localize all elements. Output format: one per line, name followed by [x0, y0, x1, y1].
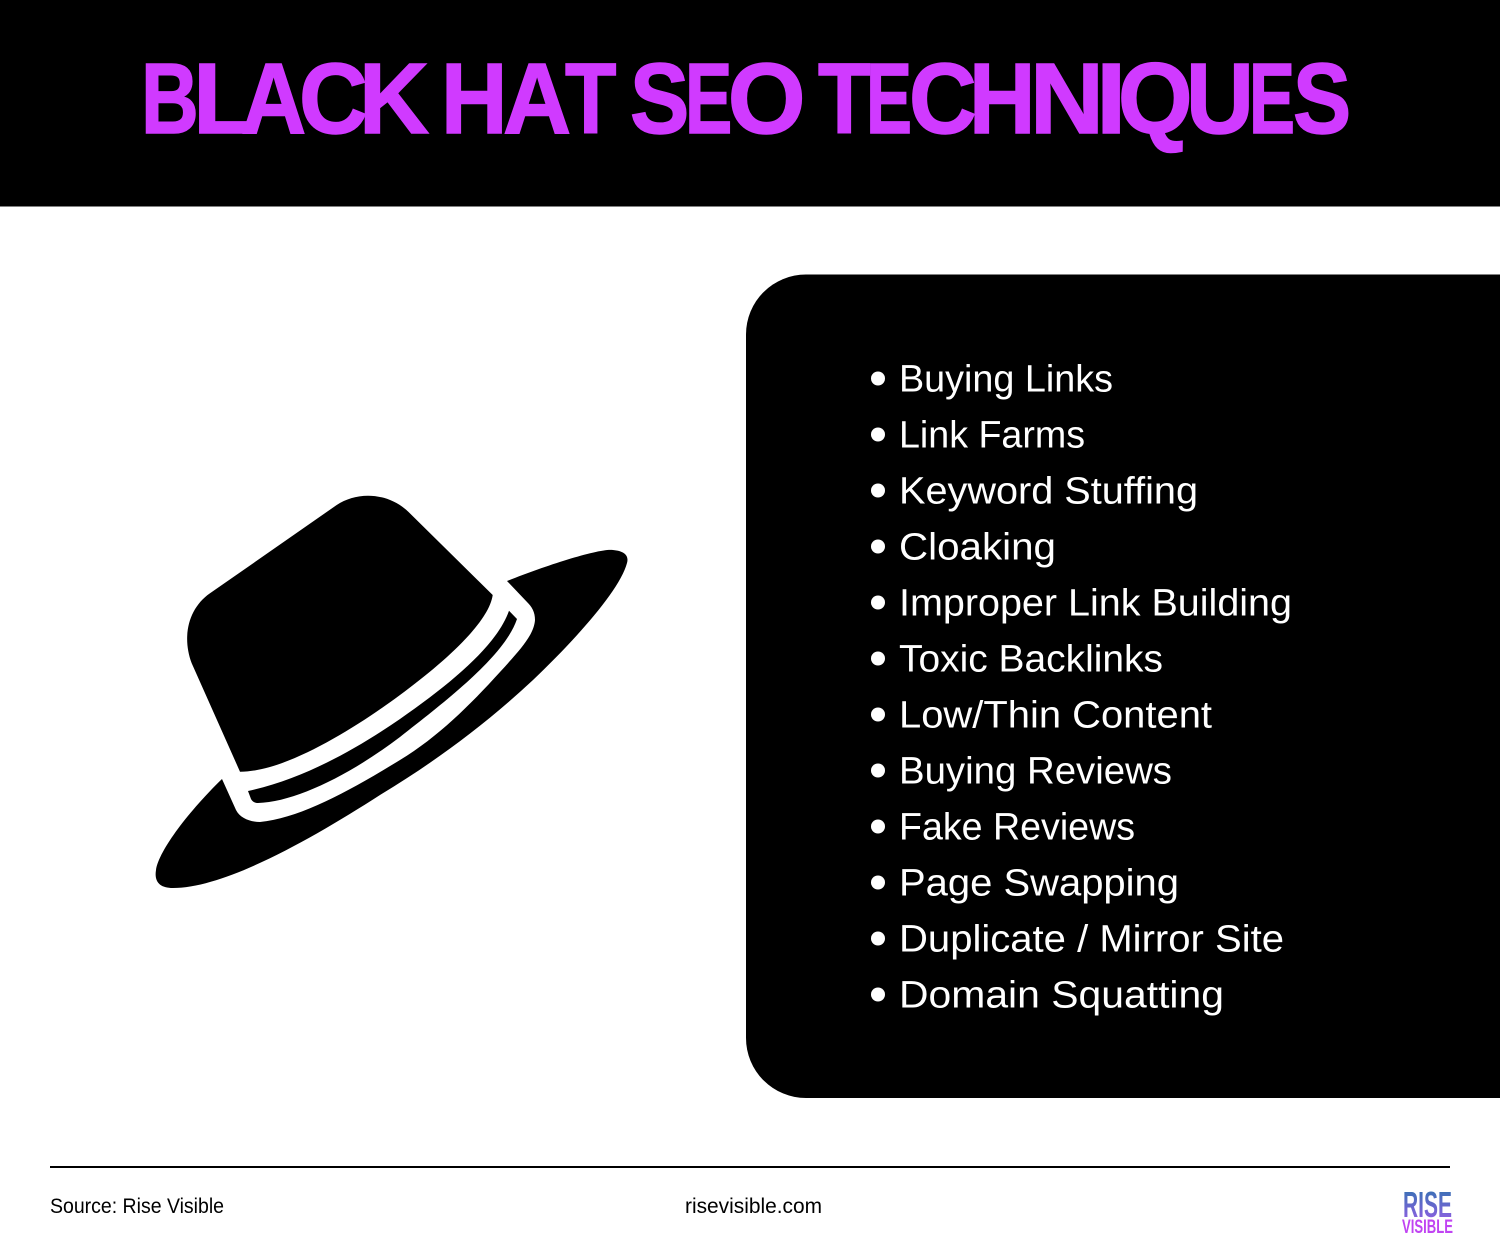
- title: A: [503, 43, 571, 155]
- title: T: [818, 43, 871, 155]
- title: E: [1249, 43, 1295, 155]
- hat brim: [156, 550, 627, 888]
- item: Duplicate / Mirror Site: Duplicate / Mirror Site: [899, 918, 1284, 960]
- logo: Rise Visible: [1402, 1184, 1453, 1238]
- title: I: [1096, 43, 1126, 155]
- title: K: [359, 43, 429, 155]
- title: A: [241, 43, 306, 155]
- title: O: [728, 43, 805, 155]
- icon: black hat: [156, 496, 627, 888]
- item: Link Farms: Link Farms: [899, 414, 1085, 456]
- item: Improper Link Building: Improper Link Building: [899, 582, 1292, 624]
- item: Fake Reviews: Fake Reviews: [899, 806, 1135, 848]
- title: N: [1030, 43, 1103, 155]
- title: C: [298, 43, 367, 155]
- title: C: [909, 43, 976, 155]
- item: Keyword Stuffing: Keyword Stuffing: [899, 470, 1198, 512]
- hat band stripe: [248, 611, 517, 803]
- item: Page Swapping: Page Swapping: [899, 862, 1179, 904]
- logo: Rise Visible: RISE: [1403, 1184, 1452, 1225]
- title: B: [141, 43, 199, 155]
- hat crown: [187, 496, 493, 772]
- title: Q: [1118, 43, 1192, 155]
- source note: Source: Rise Visible: [50, 1195, 224, 1218]
- title: H: [441, 43, 508, 155]
- item: Domain Squatting: Domain Squatting: [899, 974, 1224, 1016]
- title: T: [565, 43, 617, 155]
- logo: Rise Visible: VISIBLE: [1402, 1217, 1453, 1238]
- title: E: [866, 43, 912, 155]
- item: Buying Links: Buying Links: [899, 358, 1113, 400]
- title: [141, 43, 1351, 155]
- item: Low/Thin Content: Low/Thin Content: [899, 694, 1212, 736]
- list of techniques: [871, 358, 1292, 1016]
- item: Toxic Backlinks: Toxic Backlinks: [899, 638, 1163, 680]
- header band: [0, 0, 1500, 206]
- title: E: [685, 43, 732, 155]
- item: Buying Reviews: Buying Reviews: [899, 750, 1172, 792]
- title: H: [969, 43, 1036, 155]
- title: S: [630, 43, 690, 155]
- item: Cloaking: Cloaking: [899, 526, 1056, 568]
- panel: technique list: [746, 274, 1500, 1098]
- title: S: [1292, 43, 1351, 155]
- website url: risevisible.com: [685, 1195, 822, 1218]
- title: L: [193, 43, 255, 155]
- title: U: [1186, 43, 1254, 155]
